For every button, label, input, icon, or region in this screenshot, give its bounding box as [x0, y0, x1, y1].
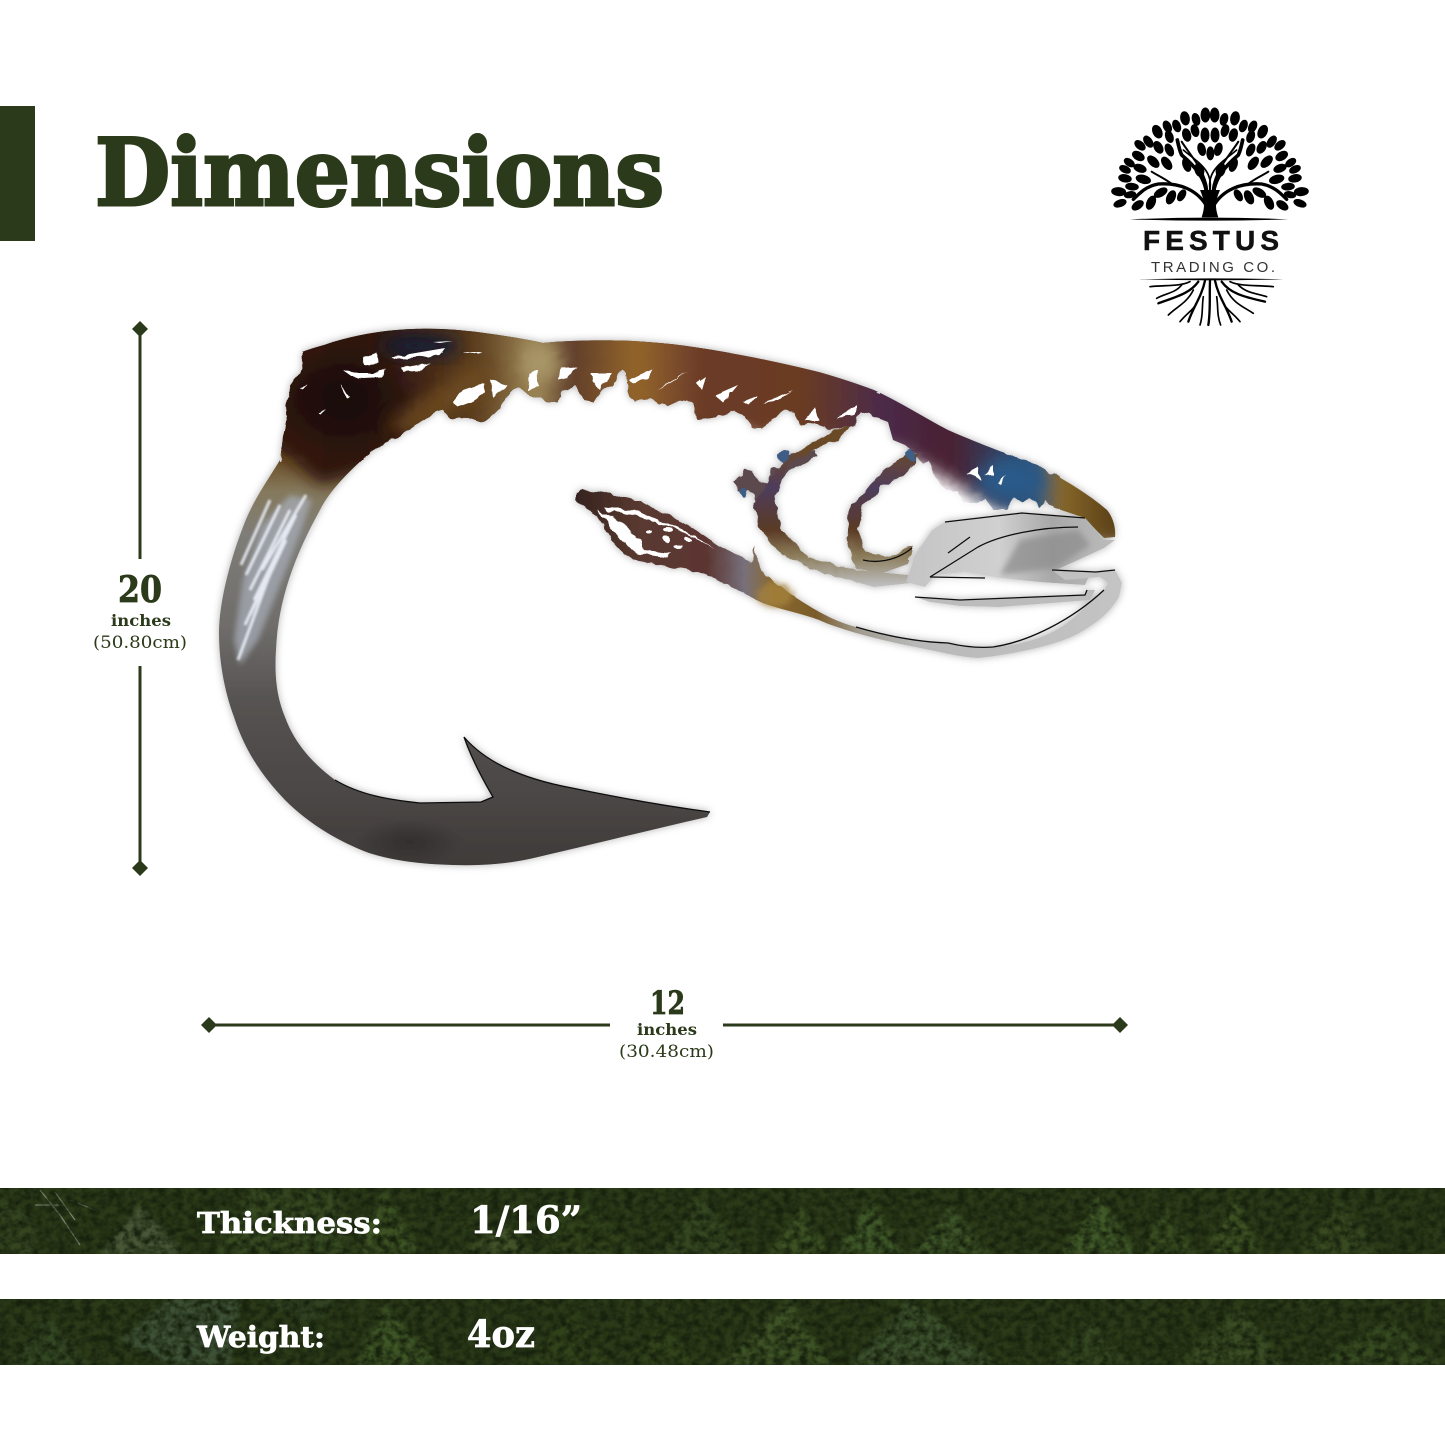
- height dimension: [93, 321, 187, 876]
- height value: 20: [118, 569, 162, 611]
- fish body and hook tail: [210, 320, 1130, 880]
- forest texture 1: [0, 1188, 1445, 1254]
- weight bar: [0, 1299, 1445, 1365]
- band cut-out holes: [300, 341, 1004, 485]
- top diamond: [132, 321, 148, 337]
- width line right: [723, 1024, 1120, 1026]
- blue spot on gill line: [905, 449, 915, 461]
- silver streak glow: [234, 495, 312, 665]
- fish artwork with organic speckled edges: [210, 320, 1130, 880]
- silver head plate: [906, 513, 1115, 587]
- logo: Festus Trading Co.: [1112, 108, 1308, 325]
- height line upper: [138, 329, 142, 559]
- logo subtitle: TRADING CO.: [1151, 259, 1275, 276]
- blue speckles: [739, 450, 789, 498]
- gill cluster speckles: [733, 450, 818, 515]
- gill arc: [754, 425, 911, 587]
- weight value: 4oz: [467, 1312, 535, 1356]
- title: Dimensions: [95, 118, 664, 227]
- height line lower: [138, 666, 142, 868]
- gill cover line: [846, 453, 918, 574]
- thickness bar: [0, 1188, 1445, 1254]
- left diamond: [201, 1017, 217, 1033]
- logo name: FESTUS: [1143, 225, 1279, 256]
- height unit: inches: [111, 611, 171, 630]
- height metric: (50.80cm): [93, 633, 187, 653]
- lower jaw inner strip: [915, 590, 1095, 607]
- bronze shimmer: [385, 365, 500, 435]
- thickness value: 1/16”: [470, 1198, 582, 1242]
- logo roots: [1139, 278, 1283, 325]
- right diamond: [1112, 1017, 1128, 1033]
- width value: 12: [650, 984, 685, 1022]
- dark hook patch: [378, 828, 438, 864]
- silver streaks: [238, 495, 306, 660]
- dark tail shoulder: [286, 352, 414, 444]
- width line left: [209, 1024, 610, 1026]
- navy shimmer: [380, 334, 460, 358]
- blue head shimmer: [978, 458, 1042, 502]
- gold shimmer: [520, 344, 560, 380]
- fin gold sheen: [757, 583, 793, 607]
- forest texture 2: [0, 1299, 1445, 1365]
- weight label: Weight:: [196, 1320, 325, 1354]
- width dimension: [201, 984, 1128, 1062]
- width unit: inches: [637, 1020, 697, 1039]
- upper back colour band: [270, 320, 1130, 545]
- head plate grey patch: [1000, 530, 1090, 575]
- dark etched lines: [335, 513, 1115, 812]
- fin cut-outs: [597, 507, 715, 558]
- fin and belly: [575, 490, 1122, 658]
- width metric: (30.48cm): [619, 1042, 714, 1062]
- thickness label: Thickness:: [197, 1206, 382, 1240]
- fish product image: [210, 320, 1130, 880]
- logo tree: [1112, 108, 1308, 221]
- accent block: [0, 106, 35, 241]
- bottom diamond: [132, 860, 148, 876]
